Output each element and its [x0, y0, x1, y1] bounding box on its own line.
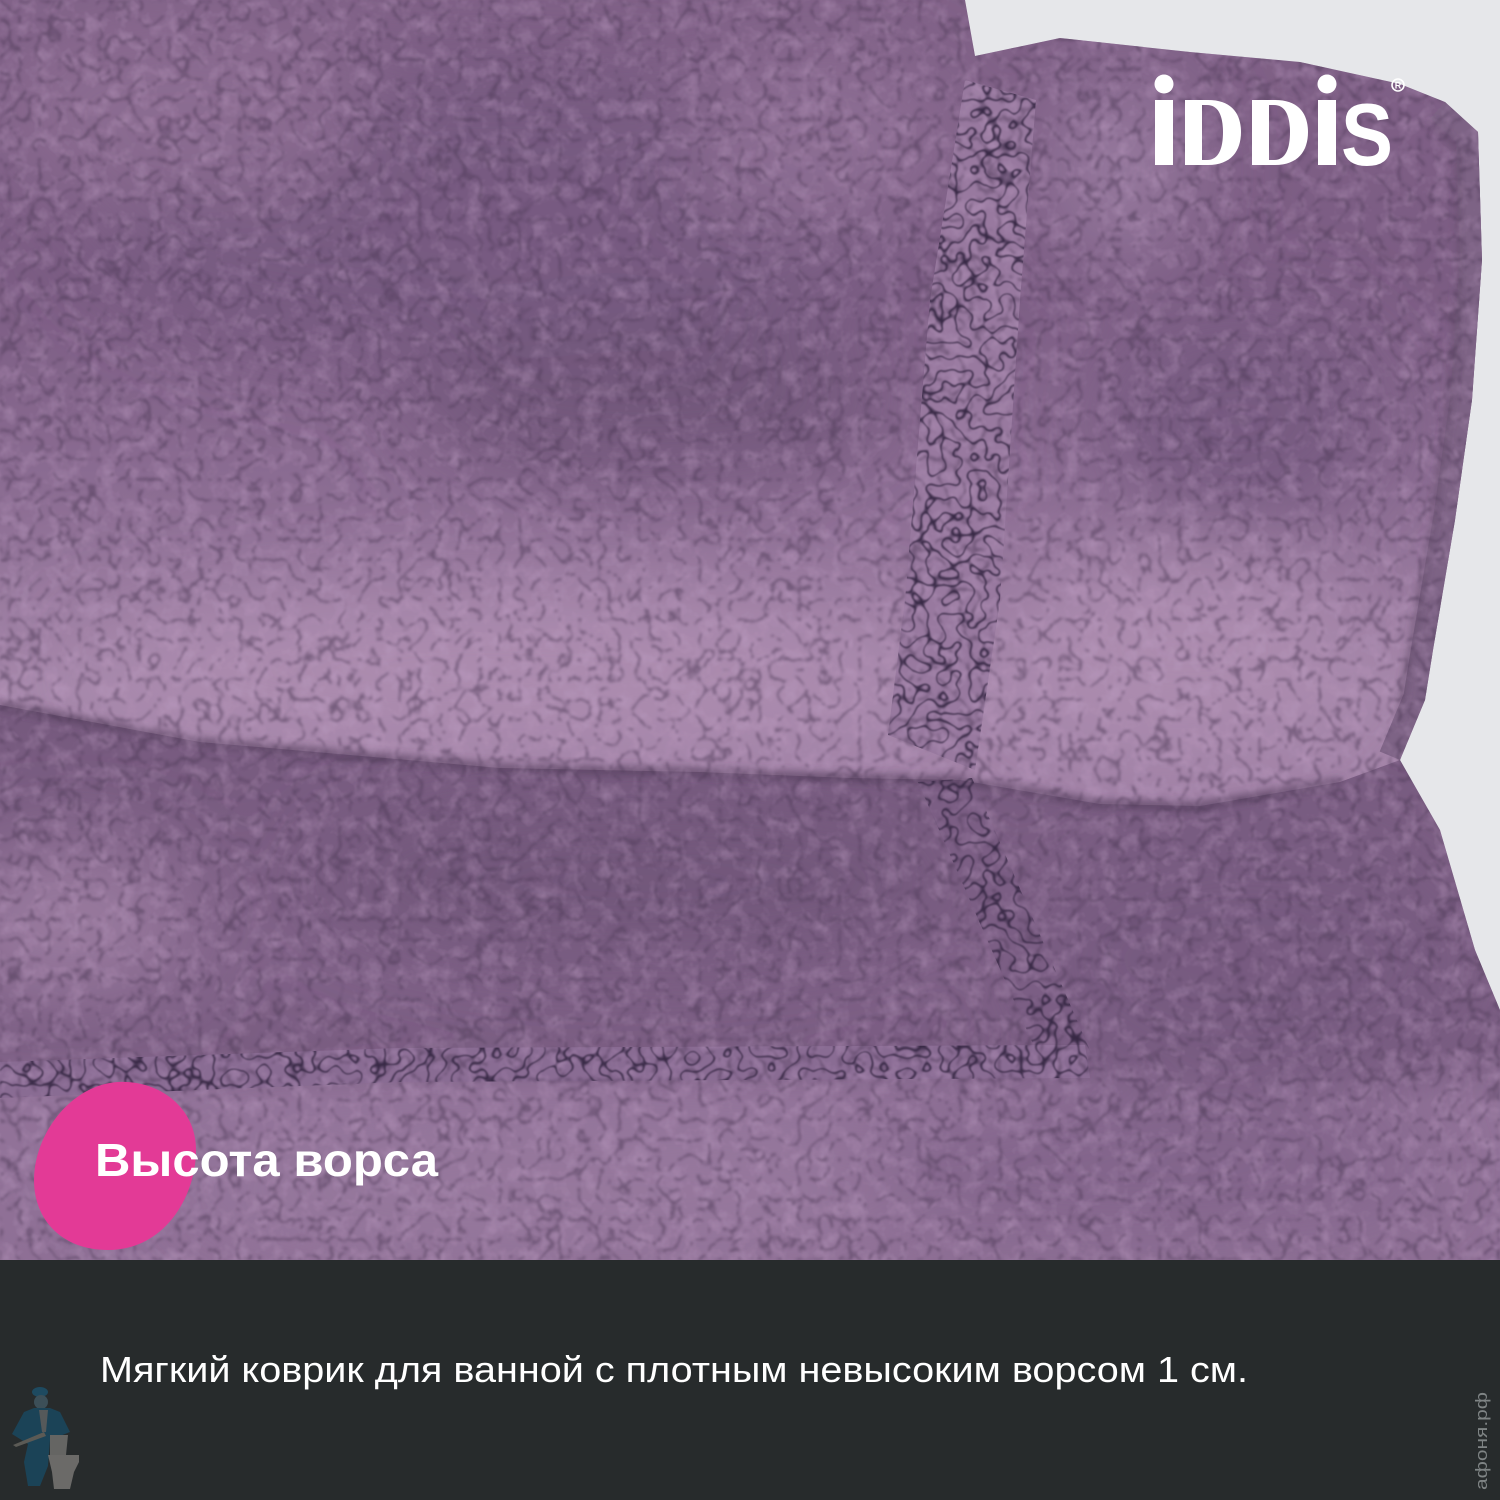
woven band on roll	[888, 80, 1036, 770]
heading: pile height: Высота ворса	[95, 1134, 439, 1186]
pink blob badge	[34, 1082, 196, 1250]
icon: plumber mascot with toilet	[12, 1387, 79, 1489]
horizontal woven border	[0, 1045, 1090, 1078]
photo: rolled bath mat	[0, 0, 1500, 810]
logo: IDDIS	[1154, 74, 1404, 184]
logo: IDDIS: S	[1341, 85, 1393, 184]
logo: IDDIS: R	[1395, 80, 1402, 90]
description text: Мягкий коврик для ванной с плотным невысоким ворсом 1 см.	[100, 1349, 1248, 1390]
roll stitched edge	[1400, 102, 1482, 760]
watermark: afonya.rf: афоня.рф	[1472, 1392, 1491, 1490]
footer band	[0, 1260, 1500, 1500]
diagonal woven border	[918, 778, 1092, 1060]
roll fold shadow	[0, 705, 1340, 806]
photo: lower bath mat	[0, 700, 1500, 1260]
